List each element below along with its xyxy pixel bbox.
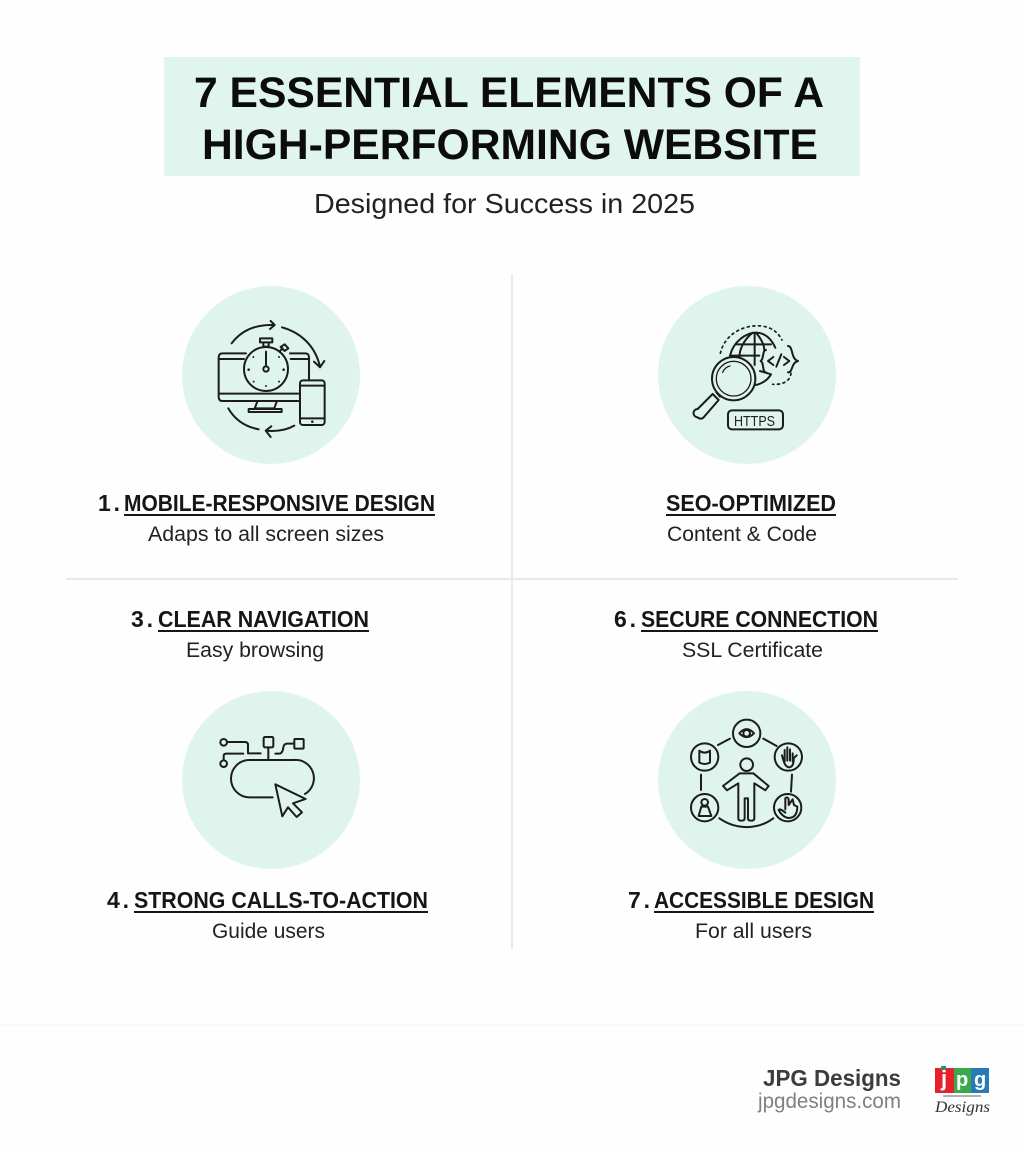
heading: 1. <box>98 490 120 516</box>
heading: SEO-OPTIMIZED <box>666 490 836 516</box>
icon: globe, magnifier and https <box>658 286 836 464</box>
heading: SECURE CONNECTION <box>641 606 878 632</box>
logo: jpg designs: Designs <box>934 1099 990 1116</box>
heading: 3. <box>131 606 153 632</box>
logo: jpg designs: j <box>940 1066 947 1091</box>
logo: jpg designs: g <box>974 1069 986 1091</box>
heading: CLEAR NAVIGATION <box>158 606 369 632</box>
icon: accessibility person ring <box>658 691 836 869</box>
subtitle: Designed for Success in 2025 <box>314 188 695 219</box>
description: For all users <box>695 920 812 943</box>
panel: clear navigation and calls-to-action <box>107 606 428 943</box>
panel: secure connection and accessible design <box>614 606 878 943</box>
description: Content & Code <box>667 523 817 546</box>
description: Guide users <box>212 920 325 943</box>
icon: navigation button and cursor <box>182 691 360 869</box>
logo: jpg designs: p <box>956 1069 968 1091</box>
heading: ACCESSIBLE DESIGN <box>654 887 874 913</box>
heading: STRONG CALLS-TO-ACTION <box>134 887 428 913</box>
description: Adaps to all screen sizes <box>148 523 384 546</box>
panel: mobile-responsive design <box>98 286 435 546</box>
title banner <box>164 57 860 176</box>
title banner: HIGH-PERFORMING WEBSITE <box>202 121 818 169</box>
footer brand text <box>757 1065 901 1113</box>
heading: 4. <box>107 887 129 913</box>
footer brand text: JPG Designs <box>763 1065 901 1091</box>
icon: globe, magnifier and https: HTTPS <box>734 414 775 430</box>
description: SSL Certificate <box>682 639 823 662</box>
logo: jpg designs <box>934 1066 990 1116</box>
heading: 7. <box>628 887 650 913</box>
heading: MOBILE-RESPONSIVE DESIGN <box>124 490 435 516</box>
title banner: 7 ESSENTIAL ELEMENTS OF A <box>194 69 824 117</box>
description: Easy browsing <box>186 639 324 662</box>
panel: seo-optimized <box>658 286 836 546</box>
footer brand text: jpgdesigns.com <box>757 1090 901 1113</box>
icon: responsive devices and stopwatch <box>182 286 360 464</box>
heading: 6. <box>614 606 636 632</box>
